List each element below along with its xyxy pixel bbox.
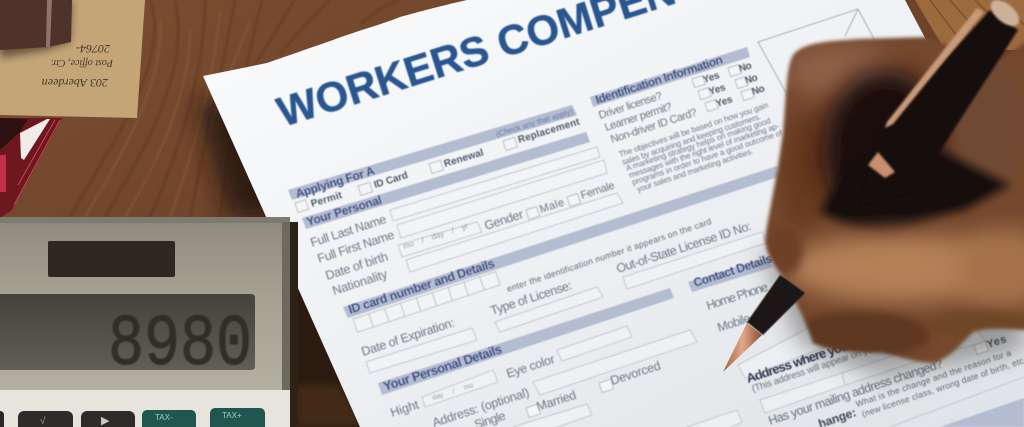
photo placeholder box [758, 9, 880, 100]
section: your personal details: Eye color [505, 352, 556, 381]
paragraph: objectives: programs in order to have a good outcome of [631, 128, 784, 187]
section: your personal [302, 132, 623, 298]
section: address: Has your mailing address changed? [767, 356, 945, 427]
section: contact details: Contact Details [692, 251, 774, 290]
section: identification information: No [751, 83, 766, 98]
calculator [0, 217, 298, 427]
section: identification information: Non-driver ID Card? [609, 107, 699, 146]
section: identification information: Learner permit? [603, 101, 674, 134]
paragraph: objectives: your sales and marketing activities. [636, 147, 754, 194]
section: identification information: No [744, 72, 759, 87]
section: your personal: Nationality [331, 267, 390, 298]
section: contact details: Home Phone [705, 280, 770, 313]
display [0, 294, 255, 386]
section: id card number: enter the identification number it appears on the card [505, 216, 713, 294]
section: your personal details: day / mo [431, 382, 474, 402]
section: identification information: Driver license? [597, 90, 664, 122]
section: contact details [688, 251, 830, 378]
section: your personal: mo / day / yr [402, 221, 470, 251]
section: applying for: Applying For A [294, 163, 377, 201]
section: your personal details: Your Personal Details [381, 341, 504, 394]
section: id card number: ID card number and Details [347, 256, 496, 317]
digit boxes [353, 272, 500, 332]
paragraph: objectives [618, 101, 784, 194]
section: your personal: Full Last Name [309, 212, 388, 250]
key strip: √ [40, 415, 46, 427]
solar panel [48, 241, 175, 277]
section: your personal details [378, 288, 742, 427]
section: applying for: Renewal [443, 147, 485, 170]
red notebook [0, 118, 62, 218]
section: your personal: Date of birth [324, 249, 390, 283]
pen copper tip [723, 323, 762, 372]
section: your personal: Gender [483, 207, 525, 233]
section: your personal: Your Personal [305, 193, 383, 229]
pen upper barrel [860, 0, 1024, 205]
section: your personal: Male [538, 197, 566, 216]
section: identification information: Yes [702, 70, 722, 86]
paragraph: objectives: A marketing strategy helps on making good [625, 116, 772, 173]
section: your personal: Female [579, 180, 616, 202]
section: identification information [590, 47, 766, 146]
section: applying for: Replacement [517, 116, 582, 146]
section: identification information: No [738, 60, 753, 75]
paragraph: objectives: The objectives will be based on how you gain [618, 101, 770, 159]
hand shadow on paper [760, 250, 1024, 378]
envelope with handwriting [0, 0, 145, 118]
section: address [744, 328, 1024, 427]
section: id card number: Out-of-State License ID No: [615, 219, 753, 276]
section: identification information: Yes [715, 94, 735, 110]
section: id card number: Type of License: [489, 278, 574, 318]
key strip: TAX+ [222, 411, 242, 420]
display: 8980 [108, 304, 252, 386]
section: id card number [343, 166, 778, 373]
key strip: ▶ [101, 415, 110, 427]
form content [288, 9, 1024, 427]
hand [760, 20, 1024, 370]
section: id card number: Date of Expiration: [360, 316, 456, 359]
section: contact details: Mobile [716, 311, 752, 335]
handwritten address: Post office, Ctr. [51, 57, 114, 68]
section: your personal details: Hight [389, 397, 421, 420]
section: applying for: ID Card [373, 170, 409, 191]
hand holding pen [723, 0, 1024, 372]
section: applying for: (Check any that apply) [495, 107, 574, 139]
section: address: (new license class, wrong date of birth, etc [860, 355, 1024, 419]
section: your personal: Full First Name [316, 228, 396, 266]
section: address: Address where you get y [744, 328, 879, 386]
section: address: What is the change and the reason for a [854, 348, 1012, 409]
pen lower barrel [747, 275, 805, 335]
key strip [0, 390, 290, 427]
section: applying for [288, 105, 582, 213]
paragraph: objectives: messages with the right level of marketing ap- [628, 121, 781, 180]
paragraph: objectives: sales by acquiring and keeping customers. [621, 112, 762, 167]
handwritten address: 20764- [76, 42, 110, 56]
section: identification information: Identification Information [594, 52, 724, 107]
key strip: TAX- [155, 413, 173, 422]
section: your personal details: Devorced [609, 358, 662, 388]
wallet on envelope [0, 0, 72, 58]
section: address: Yes [985, 333, 1008, 351]
section: address: (This address will appear on your [750, 342, 882, 395]
handwritten address: 203 Aberdeen [42, 76, 108, 90]
handwritten address [42, 42, 114, 90]
section: applying for: Permit [310, 190, 344, 210]
section: identification information: Yes [708, 82, 728, 98]
section: your personal details: Married [535, 388, 578, 414]
